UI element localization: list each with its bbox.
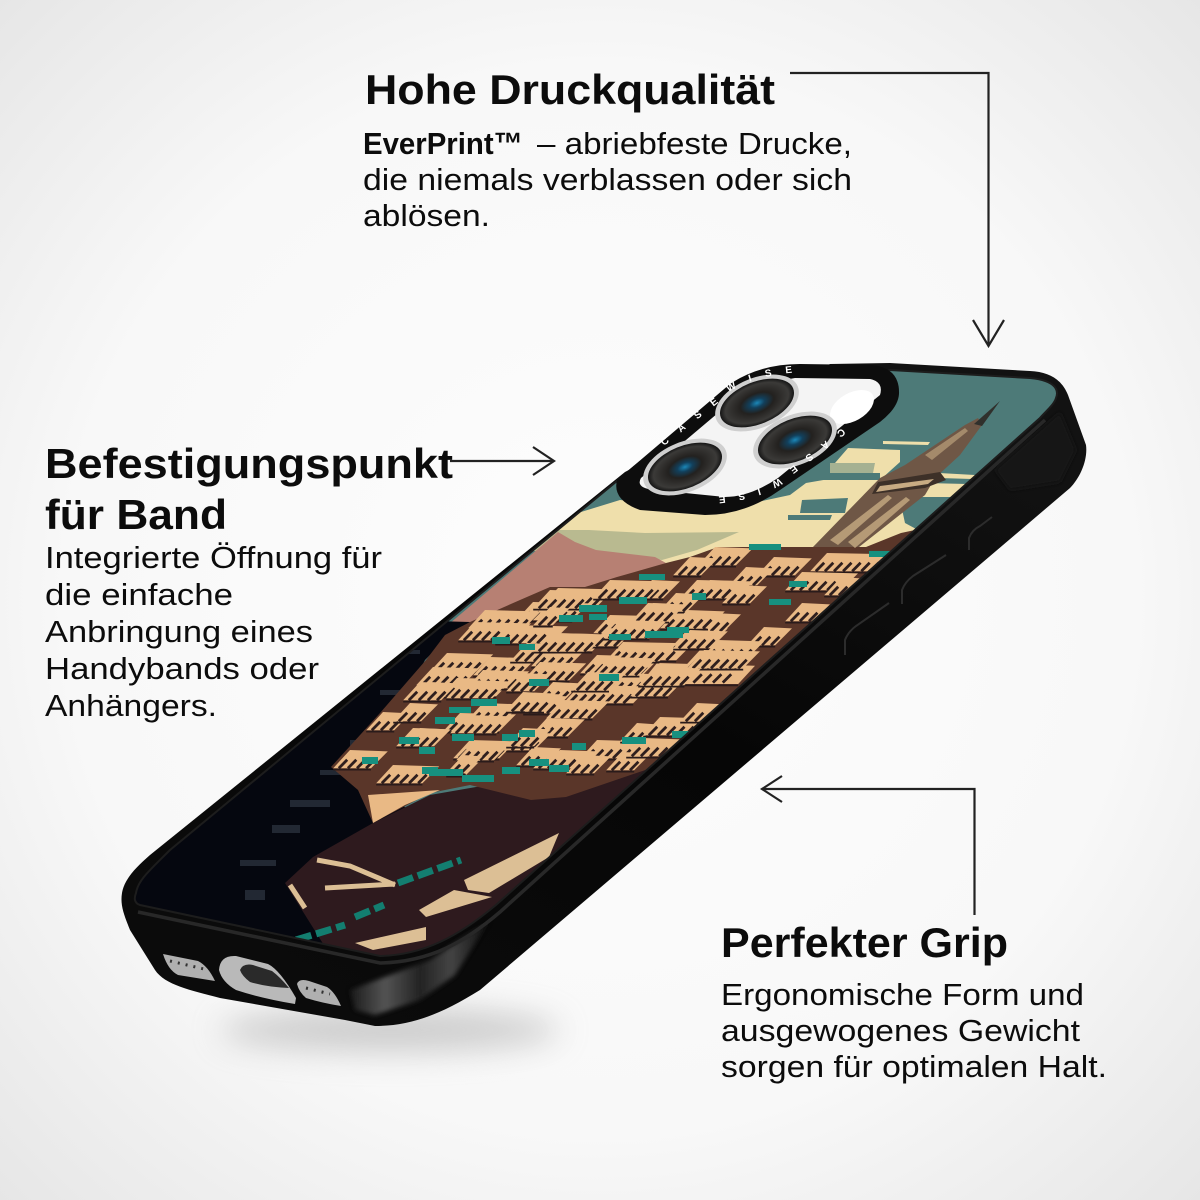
tower (813, 401, 1000, 548)
usb port (219, 956, 296, 1004)
camera ring (616, 364, 899, 515)
side buttons (845, 517, 992, 655)
callout: Perfekter Grip: sorgen für optimalen Halt. (721, 1049, 1107, 1084)
arrow: lanyard point (450, 447, 554, 475)
callout: Hohe Druckqualität: ablösen. (363, 198, 490, 233)
camera glass (640, 378, 881, 497)
lower dark hillside (285, 770, 646, 955)
spire (974, 401, 1000, 426)
ring brand text: CASEWISE (662, 366, 792, 444)
arrow: grip (762, 776, 974, 915)
camera module (616, 364, 899, 515)
camera module: CASEWISE (718, 429, 845, 504)
building mass (331, 530, 914, 823)
callout: Befestigungspunkt: Anbringung eines (45, 614, 313, 649)
callout: Hohe Druckqualität: – abriebfeste Drucke, (537, 126, 852, 161)
callout: Perfekter Grip: ausgewogenes Gewicht (721, 1013, 1080, 1048)
teal foliage (363, 545, 890, 781)
clouds (559, 448, 915, 564)
body text: EverPrint™ (363, 126, 523, 161)
heading: Perfekter Grip (721, 919, 1008, 966)
heading: Befestigungspunkt (45, 440, 453, 487)
arrow: print quality (790, 73, 1004, 346)
case body (121, 363, 1086, 1026)
lens flash (824, 383, 880, 431)
left speaker (163, 954, 215, 981)
screen rim (135, 370, 1057, 956)
phone case illustration (122, 363, 1086, 1026)
bottom ports (163, 954, 341, 1006)
callout: Befestigungspunkt: Handybands oder (45, 651, 319, 686)
grey-blue haze blocks (240, 650, 420, 900)
sky (404, 371, 1056, 808)
dark left foreground (136, 621, 470, 943)
corner sheen (350, 920, 490, 1015)
callout: Hohe Druckqualität: die niemals verblassen oder sich (363, 162, 852, 197)
lenses (635, 363, 845, 507)
body text: Ergonomische Form und (721, 977, 1084, 1012)
distant haze (520, 530, 739, 560)
body text: Integrierte Öffnung für (45, 540, 382, 575)
printed artwork (240, 371, 1056, 955)
callout: Perfekter Grip (721, 919, 1107, 1084)
lower edge bevel (138, 420, 1045, 963)
building blocks (333, 547, 897, 823)
lower teal foliage (296, 860, 461, 940)
phone shadow (220, 1008, 560, 1052)
callout: Befestigungspunkt: die einfache (45, 577, 233, 612)
right speaker (297, 980, 341, 1006)
callout: Hohe Druckqualität (363, 66, 852, 233)
callout: Befestigungspunkt (45, 440, 453, 723)
pink hills (452, 532, 666, 622)
callout: Befestigungspunkt: Anhängers. (45, 688, 217, 723)
tan spur (368, 790, 440, 823)
callout: Befestigungspunkt: für Band (45, 491, 227, 538)
heading: Hohe Druckqualität (365, 66, 775, 113)
lower tan ruins (290, 833, 559, 950)
side panel highlight (995, 412, 1076, 490)
